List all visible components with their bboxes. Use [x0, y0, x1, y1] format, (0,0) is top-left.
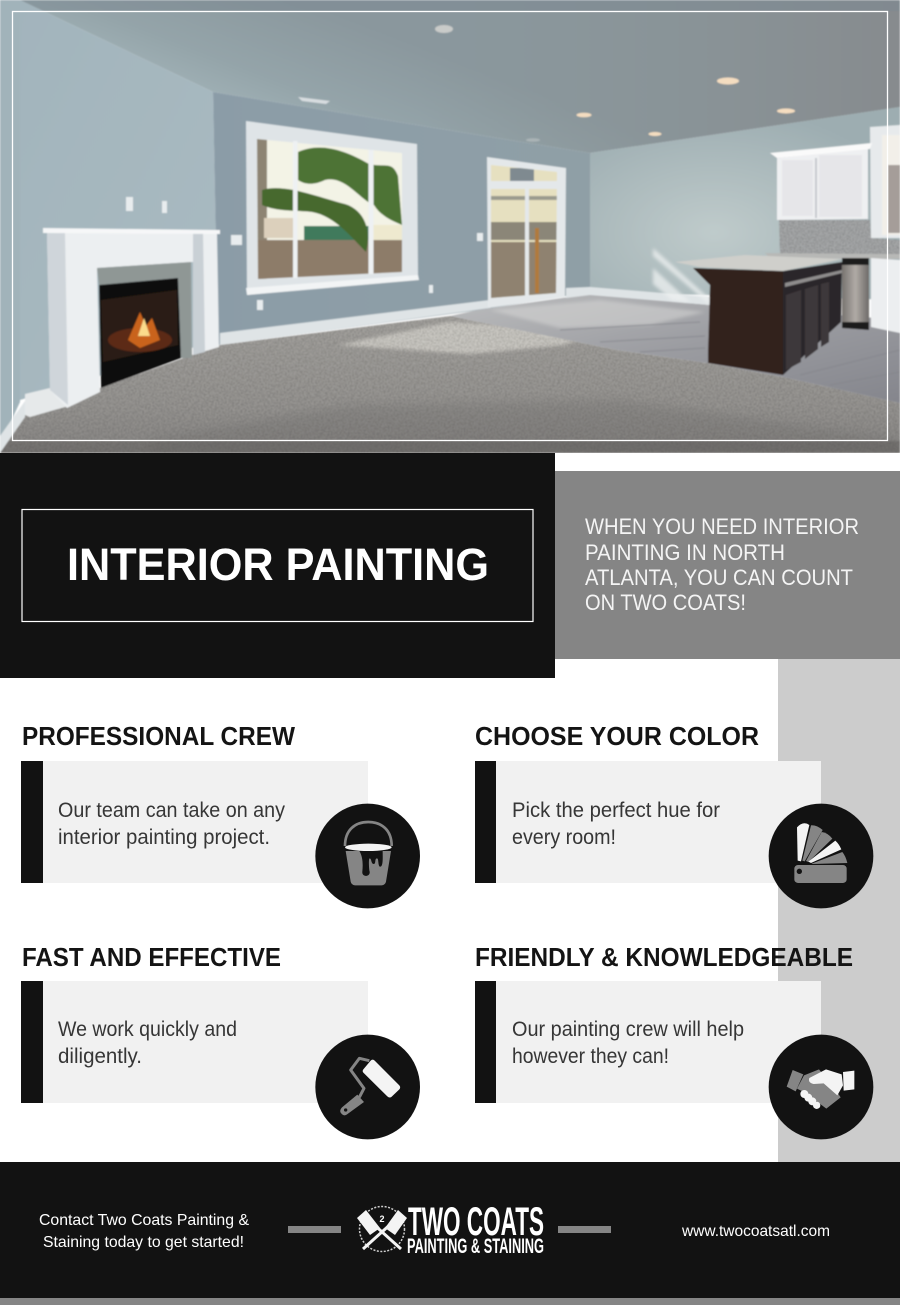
fireplace: [43, 228, 220, 408]
carpet texture: [0, 316, 900, 453]
panel: intro message: ATLANTA, YOU CAN COUNT: [585, 565, 853, 590]
panel: intro message: [555, 471, 900, 659]
logo: two coats painting and staining: TWO COATS: [408, 1200, 544, 1244]
panel: friendly and knowledgeable: however they can!: [512, 1045, 669, 1068]
logo: two coats painting and staining: PAINTING & STAINING: [407, 1235, 544, 1258]
panel: professional crew: Our team can take on any: [58, 799, 285, 822]
icon: colour swatch fan: [769, 804, 873, 908]
wood floor: [450, 294, 900, 403]
ceiling: [0, 0, 900, 153]
panel: fast and effective: diligently.: [58, 1045, 142, 1068]
kitchen window: [870, 125, 900, 238]
white photo frame: [12, 12, 888, 440]
upper cabinets: [770, 143, 872, 220]
panel: friendly and knowledgeable: FRIENDLY & KNOWLEDGEABLE: [475, 942, 853, 972]
panel: intro message: WHEN YOU NEED INTERIOR: [585, 514, 859, 539]
panel: friendly and knowledgeable: [475, 942, 873, 1139]
ceiling lights: [435, 25, 795, 142]
panel: footer: Contact Two Coats Painting &: [39, 1212, 249, 1229]
icon: handshake: [769, 1035, 873, 1139]
logo emblem: crossed brushes: 2: [379, 1214, 385, 1224]
light grey accent strip: [778, 659, 900, 1162]
vent: [298, 97, 330, 104]
kitchen island: [675, 255, 843, 375]
carpet floor: [0, 316, 900, 453]
panel: fast and effective: FAST AND EFFECTIVE: [22, 942, 281, 972]
panel: choose your color: every room!: [512, 826, 616, 849]
panel: intro message: ON TWO COATS!: [585, 590, 746, 615]
left wall: [20, 0, 218, 400]
panel: fast and effective: [21, 942, 420, 1139]
panel: choose your color: CHOOSE YOUR COLOR: [475, 721, 759, 751]
panel: professional crew: [21, 721, 420, 908]
heading: interior painting: INTERIOR PAINTING: [67, 539, 489, 590]
sliding patio door: [487, 157, 566, 308]
panel: professional crew: PROFESSIONAL CREW: [22, 721, 295, 751]
carpet sunlight patch: [338, 322, 600, 354]
panel: footer: [0, 1162, 900, 1305]
baseboards: [220, 300, 490, 345]
hero photo: empty living room with fireplace: [0, 0, 900, 453]
sun reflection on right wall: [653, 248, 709, 304]
panel: footer: Staining today to get started!: [43, 1234, 244, 1251]
panel: fast and effective: We work quickly and: [58, 1018, 237, 1041]
large window: [246, 121, 419, 295]
logo: two coats painting and staining: [357, 1200, 544, 1258]
wall switches: [126, 197, 483, 310]
icon: paint roller: [315, 1035, 420, 1139]
back wall: [213, 92, 590, 345]
panel: intro message: PAINTING IN NORTH: [585, 540, 785, 565]
icon: paint bucket: [315, 804, 420, 908]
lower cabinets and dishwasher: [765, 253, 900, 333]
backsplash: [779, 220, 900, 254]
logo emblem: crossed brushes: [357, 1206, 407, 1252]
panel: title block: [0, 453, 555, 678]
panel: choose your color: [475, 721, 873, 908]
panel: footer: www.twocoatsatl.com: [681, 1223, 830, 1240]
narrow left wall strip: [0, 0, 20, 445]
panel: friendly and knowledgeable: Our painting crew will help: [512, 1018, 744, 1041]
right wall: [590, 107, 900, 300]
panel: choose your color: Pick the perfect hue for: [512, 799, 720, 822]
panel: professional crew: interior painting project.: [58, 826, 270, 849]
